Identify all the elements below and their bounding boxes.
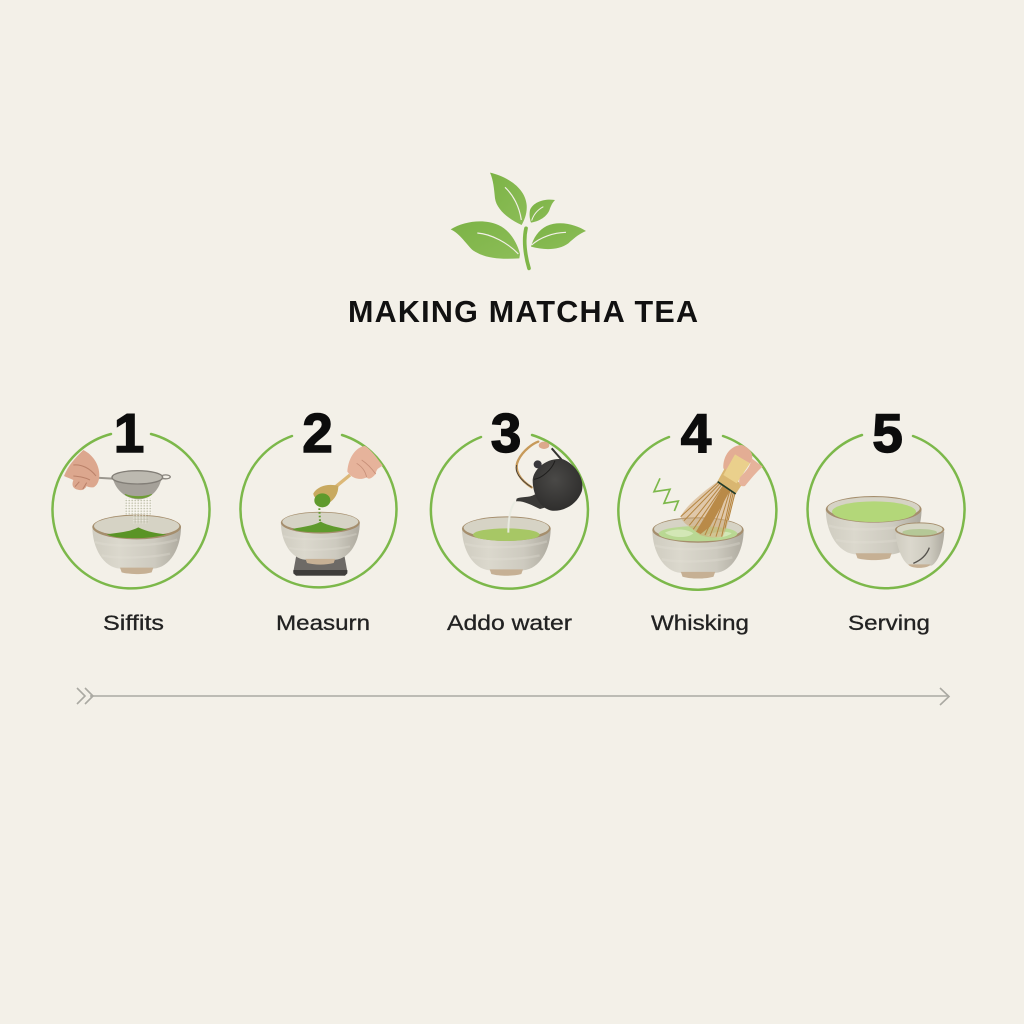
step number 1: 1: [114, 402, 144, 464]
label: Addo water: Addo water: [447, 612, 572, 635]
label: Measurn: Measurn: [276, 612, 370, 635]
green ring 4: [618, 436, 776, 590]
step number 2: 2: [302, 402, 333, 464]
step number 4: 4: [681, 402, 712, 464]
panel: step 2 measuring: [240, 402, 396, 635]
green ring 2: [240, 435, 396, 587]
label: Siffits: Siffits: [103, 612, 164, 635]
illustration: teapot pouring water into bowl: [462, 442, 582, 576]
title: MAKING MATCHA TEA: [348, 295, 698, 329]
illustration: bamboo whisk in bowl: [652, 445, 763, 578]
panel: step 3 adding water: [431, 402, 588, 635]
arrow: process timeline: [77, 688, 949, 705]
label: Serving: Serving: [848, 612, 930, 635]
green ring 3: [431, 435, 588, 589]
panel: step 5 serving: [808, 402, 965, 635]
label: Whisking: Whisking: [651, 612, 749, 635]
green ring 1: [52, 434, 210, 588]
step number 5: 5: [872, 402, 903, 464]
panel: step 4 whisking: [618, 402, 776, 635]
green ring 5: [808, 435, 965, 588]
illustration: large bowl and small cup of matcha: [826, 496, 944, 568]
illustration: hand scooping matcha over bowl on scale: [281, 446, 383, 576]
icon: green tea sprig logo: [451, 173, 586, 268]
panel: step 1 sifting: [52, 402, 210, 635]
illustration: hand sifting matcha into bowl: [64, 450, 181, 574]
step number 3: 3: [491, 402, 521, 464]
